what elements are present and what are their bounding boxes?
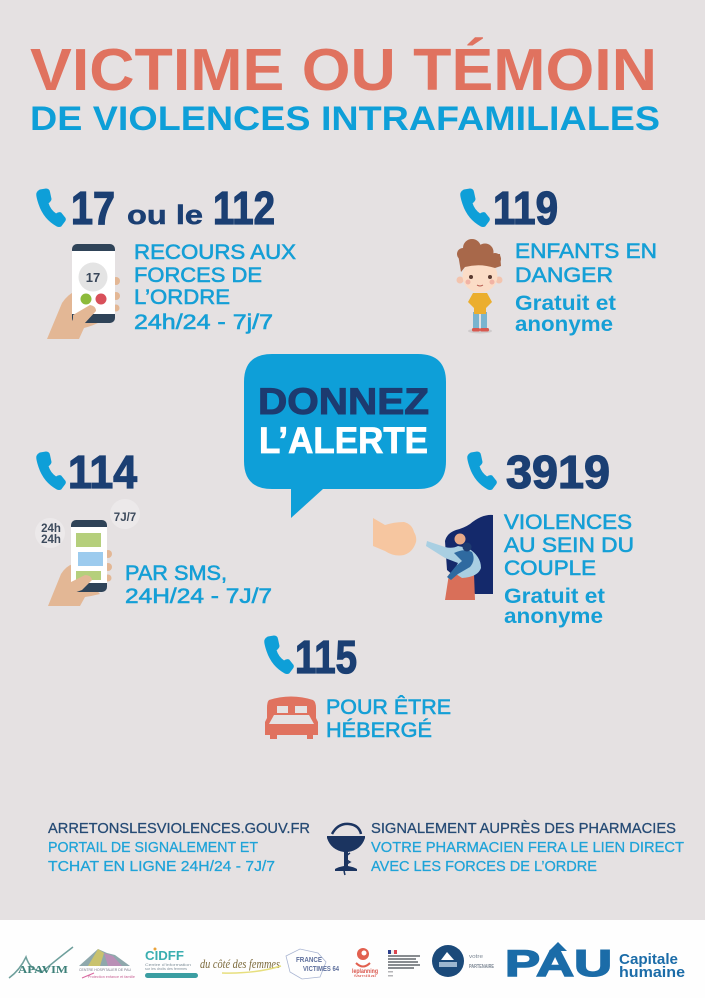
logo: CIDFF [145,948,198,978]
text block: website: PORTAIL DE SIGNALEMENT ET [48,840,258,856]
text block: FORCES DE [134,263,262,287]
text block: POUR ÊTRE [326,694,451,719]
text block: Gratuit et [515,292,616,315]
icon: hand holding phone with SMS [35,499,140,606]
text block [515,239,657,336]
logo: République française [388,950,420,976]
text block [326,694,451,742]
text block: website: TCHAT EN LIGNE 24H/24 - 7J/7 [48,859,275,875]
text block [504,510,634,628]
logo: circle partner: PARTENAIRE [469,964,494,970]
logo: le planning familial [352,948,378,978]
panel: 119 [456,182,657,336]
text block: website [48,821,310,875]
icon: phone handset [37,189,65,226]
text block: anonyme [515,313,613,336]
text block: pharmacies [371,820,684,875]
text block: AU SEIN DU [504,533,634,557]
logo: Pau capitale humaine: humaine [619,964,685,981]
logo: circle partner [432,945,494,977]
panel: 114 [35,446,272,608]
logo: APAVIM: APAVIM [18,964,69,976]
icon: child [456,239,502,334]
logo: France Victimes [286,949,339,979]
logo: CIDFF: Centre d'information [145,963,191,967]
icon: hand holding phone with SMS: 24h [41,534,61,546]
callout: donnez l'alerte: L’ALERTE [259,420,428,461]
logo: Pau capitale humaine: PAU [505,943,612,984]
logo: Pau capitale humaine: Capitale [619,951,678,968]
text block: Gratuit et [504,585,605,608]
callout: donnez l'alerte: DONNEZ [258,381,429,422]
number heading: 3919 [506,446,610,498]
icon: woman protecting child [426,515,493,600]
panel: 17 ou 112 [37,182,296,339]
title: DE VIOLENCES INTRAFAMILIALES [30,100,660,138]
text block: ENFANTS EN [515,239,657,263]
number heading [71,182,275,234]
text block: anonyme [504,605,603,628]
logo: France Victimes: VICTIMES 64 [303,966,339,973]
icon: hand holding phone with 17: 17 [86,270,100,285]
text block: HÉBERGÉ [326,717,432,742]
panel: 115 [265,631,451,742]
logo: du côté des femmes: du côté des femmes [200,956,280,971]
panel: partner logos [0,920,705,998]
title [30,37,660,138]
logo: APAVIM [9,947,73,978]
logo: Pau capitale humaine [505,942,685,984]
number heading: 115 [295,631,357,683]
icon: fist [373,518,416,556]
logo: CIDFF: CIDFF [145,948,184,963]
text block: PAR SMS, [125,561,227,585]
logo: centre hospitalier de Pau: Protection enfance et famille [88,975,135,979]
number heading: 114 [68,446,137,498]
text block: 24h/24 - 7j/7 [134,310,273,334]
logo: centre hospitalier de Pau: CENTRE HOSPITALIER DE PAU [79,967,131,972]
icon: hand holding phone with SMS: 24h [41,523,61,535]
logo: centre hospitalier de Pau [79,949,135,979]
icon: phone handset [468,452,496,490]
icon: hand holding phone with SMS: 7J/7 [114,512,136,524]
icon: phone handset [461,189,489,226]
text block: DANGER [515,263,613,287]
text block: pharmacies: SIGNALEMENT AUPRÈS DES PHARMACIES [371,820,676,837]
text block [134,240,296,334]
logo: CIDFF: sur les droits des femmes [145,967,187,971]
number heading: ou le [127,200,203,230]
icon: bed [265,696,318,739]
logo: France Victimes: FRANCE [296,957,322,964]
icon: pharmacy caduceus [327,824,365,875]
title: VICTIME OU TÉMOIN [30,37,657,103]
logo: le planning familial: familial [354,974,376,978]
icon: phone handset [265,636,293,674]
text block: COUPLE [504,556,596,580]
number heading: 119 [493,182,558,234]
panel: 3919 [373,446,634,628]
logo: circle partner: votre [469,954,483,960]
icon: hand holding phone with 17 [47,244,120,339]
text block: 24H/24 - 7J/7 [125,584,272,608]
text block: pharmacies: VOTRE PHARMACIEN FERA LE LIEN DIRECT [371,840,684,856]
text block [125,561,272,608]
text block: website: ARRETONSLESVIOLENCES.GOUV.FR [48,821,310,837]
text block: RECOURS AUX [134,240,296,264]
number heading: 112 [213,182,275,234]
icon: phone handset [37,452,65,490]
text block: pharmacies: AVEC LES FORCES DE L’ORDRE [371,859,597,875]
number heading: 17 [71,182,115,234]
text block: VIOLENCES [504,510,632,534]
logo: le planning familial: leplanning [352,968,378,975]
callout: donnez l'alerte [244,354,446,518]
text block: L’ORDRE [134,285,230,309]
